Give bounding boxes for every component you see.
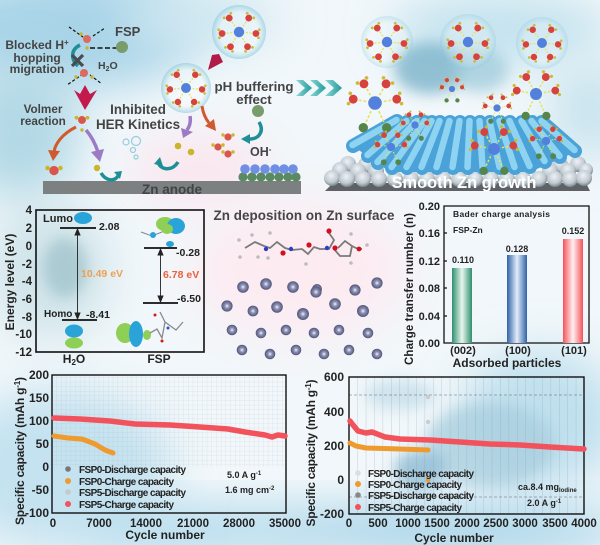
energy labels: Lumo bbox=[43, 213, 73, 225]
FSP molecule on surface bbox=[237, 228, 369, 266]
y ticks: -8 bbox=[22, 312, 33, 324]
panel: Zn deposition model bbox=[214, 208, 394, 359]
legend: FSP0-Charge capacity bbox=[368, 480, 462, 491]
x ticks: 7000 bbox=[86, 518, 112, 530]
label: OH-: - bbox=[269, 145, 272, 154]
energy labels: 2.08 bbox=[99, 221, 120, 233]
y ticks: -2 bbox=[22, 259, 32, 271]
arrow: teal chevrons bbox=[296, 80, 342, 96]
x ticks: 4000 bbox=[571, 518, 597, 530]
x ticks: 14000 bbox=[130, 518, 162, 530]
y ticks: 150 bbox=[29, 391, 49, 405]
x ticks: 3000 bbox=[512, 518, 538, 530]
label: Inhibited HER Kinetics: Inhibited bbox=[110, 102, 166, 117]
conditions bbox=[518, 482, 577, 508]
energy levels bbox=[60, 228, 178, 320]
bar values: 0.152 bbox=[562, 226, 584, 236]
x axis title: Cycle number bbox=[414, 531, 494, 545]
y ticks: 0 bbox=[42, 460, 49, 474]
x ticks: 0 bbox=[346, 518, 352, 530]
Zn anode bar: Zn anode bbox=[142, 182, 202, 197]
plot frame bbox=[444, 206, 589, 343]
legend: FSP5-Discharge capacity bbox=[79, 488, 186, 499]
y axis title: ) bbox=[13, 377, 27, 381]
arrow: orange bbox=[202, 106, 216, 131]
x labels: FSP bbox=[147, 352, 171, 366]
x ticks: 3500 bbox=[542, 518, 568, 530]
y ticks: 0 bbox=[26, 241, 32, 253]
legend: FSP5-Discharge capacity bbox=[368, 491, 474, 502]
x ticks bbox=[50, 518, 301, 530]
panel: right cycling chart bbox=[304, 370, 597, 545]
y ticks: 0.04 bbox=[419, 311, 441, 323]
y ticks: 0.12 bbox=[419, 256, 440, 268]
orbitals: FSP HOMO bbox=[116, 312, 183, 347]
annotations: FSP-Zn bbox=[453, 225, 483, 235]
heading: Zn deposition on Zn surface bbox=[214, 208, 394, 223]
x ticks: 35000 bbox=[269, 518, 301, 530]
series: FSP5 charge bbox=[54, 418, 285, 437]
label: Blocked H+ hopping migration: migration bbox=[10, 62, 64, 76]
y ticks: 2 bbox=[26, 223, 32, 235]
icon: blocked arrow bbox=[72, 45, 83, 66]
energy labels: -8.41 bbox=[86, 309, 110, 321]
molecule: H intermediates bbox=[154, 143, 194, 169]
arrow: crimson into bubble bbox=[208, 54, 223, 70]
y ticks bbox=[320, 370, 344, 521]
bar values: 0.110 bbox=[452, 255, 474, 265]
panel: HER suppression mechanism bbox=[5, 5, 301, 197]
y ticks: 100 bbox=[29, 414, 49, 428]
orbitals: FSP LUMO bbox=[141, 217, 185, 247]
legend: FSP5-Charge capacity bbox=[368, 503, 462, 514]
label: H2O: O bbox=[110, 60, 118, 72]
gray Zn base bbox=[324, 156, 593, 191]
molecule: product water bbox=[45, 166, 63, 175]
y ticks: 400 bbox=[324, 405, 344, 419]
bubble: solvated Zn lower bbox=[161, 63, 211, 113]
x ticks: 21000 bbox=[177, 518, 209, 530]
y ticks: 0.16 bbox=[419, 228, 440, 240]
x ticks bbox=[346, 518, 597, 530]
x ticks: 1000 bbox=[395, 518, 421, 530]
gap values: 6.78 eV bbox=[163, 269, 199, 281]
gap values bbox=[81, 268, 199, 281]
y ticks: -100 bbox=[25, 506, 49, 520]
x labels: (101) bbox=[561, 345, 587, 357]
y axis title: Energy level (eV) bbox=[3, 234, 17, 330]
panel: smooth Zn growth surface bbox=[324, 14, 593, 192]
label: Volmer reaction: Volmer bbox=[24, 103, 63, 116]
label: Blocked H+ hopping migration: hopping bbox=[13, 51, 61, 65]
bubble: solvated Zn upper bbox=[212, 5, 266, 59]
y ticks: 4 bbox=[26, 205, 33, 217]
bubbles with solvated Zn bbox=[361, 14, 568, 70]
label: Blocked H+ hopping migration: + bbox=[64, 38, 69, 47]
molecule: blocked water with FSP bbox=[67, 27, 128, 85]
conditions: 5.0 A g bbox=[227, 470, 256, 480]
gap values: 10.49 eV bbox=[81, 268, 123, 280]
arrow: purple right bbox=[86, 130, 104, 162]
label: Smooth Zn growth: Smooth Zn growth bbox=[392, 174, 536, 192]
y ticks: 0.08 bbox=[419, 283, 440, 295]
y axis title: Specific capacity (mAh g bbox=[304, 390, 318, 526]
y ticks: -10 bbox=[15, 329, 32, 341]
conditions: Iodine bbox=[559, 488, 577, 494]
conditions: 2.0 A g bbox=[527, 498, 556, 508]
energy labels: -6.50 bbox=[177, 293, 201, 305]
energy labels: Homo bbox=[44, 309, 72, 320]
adsorbed layers bbox=[238, 164, 301, 182]
stray points bbox=[426, 395, 430, 482]
x ticks: 28000 bbox=[223, 518, 255, 530]
label: Volmer reaction: reaction bbox=[20, 115, 66, 128]
molecule: water cluster bbox=[211, 133, 235, 158]
legend bbox=[355, 469, 474, 514]
label: OH-: OH bbox=[250, 145, 269, 159]
y ticks: 50 bbox=[36, 437, 49, 451]
x ticks: 2500 bbox=[483, 518, 509, 530]
arrow: orange left bbox=[48, 127, 76, 161]
icon: FSP buffer ball and arrow bbox=[241, 105, 264, 144]
y ticks bbox=[15, 205, 33, 359]
grid bbox=[349, 377, 584, 514]
y ticks bbox=[419, 201, 441, 350]
panel: energy level diagram bbox=[3, 205, 204, 367]
label: Blocked H+ hopping migration: Blocked H bbox=[5, 38, 69, 52]
gap arrows bbox=[75, 229, 163, 319]
x ticks: 500 bbox=[368, 518, 388, 530]
legend bbox=[65, 465, 186, 511]
y ticks: 0.00 bbox=[419, 338, 440, 350]
y ticks: 600 bbox=[324, 370, 344, 384]
x ticks: 1500 bbox=[424, 518, 450, 530]
y ticks: -50 bbox=[32, 483, 49, 497]
panel: left cycling chart bbox=[13, 368, 301, 542]
conditions: -1 bbox=[556, 499, 562, 505]
x labels: H bbox=[63, 352, 71, 366]
plot frame bbox=[349, 377, 584, 514]
series: FSP5 charge bbox=[350, 421, 584, 449]
series: FSP0 charge bbox=[54, 436, 113, 453]
x axis title: Adsorbed particles bbox=[453, 356, 562, 370]
orbitals: H2O bbox=[65, 212, 92, 348]
y ticks: -4 bbox=[22, 276, 33, 288]
molecule: Volmer water bbox=[75, 116, 89, 132]
y ticks: 200 bbox=[29, 368, 49, 382]
conditions: -2 bbox=[269, 486, 275, 492]
blue Zn capsules bbox=[352, 118, 578, 172]
conditions: 1.6 mg cm bbox=[225, 485, 269, 495]
x labels: (002) bbox=[450, 345, 476, 357]
label: H2O: 2 bbox=[106, 66, 110, 73]
plot frame bbox=[52, 375, 286, 513]
y axis title: Specific capacity (mAh g bbox=[13, 387, 27, 525]
label: pH buffering effect: pH buffering bbox=[214, 79, 294, 94]
y axis title: Charge transfer number (n) bbox=[404, 213, 416, 365]
x ticks: 2000 bbox=[454, 518, 480, 530]
label: Inhibited HER Kinetics: HER Kinetics bbox=[96, 117, 180, 132]
bar values bbox=[452, 226, 584, 265]
legend: FSP0-Discharge capacity bbox=[368, 469, 474, 480]
x labels bbox=[450, 345, 587, 357]
label: H2O: H bbox=[98, 60, 106, 72]
label: FSP: FSP bbox=[115, 24, 141, 39]
series: FSP0 charge bbox=[350, 443, 428, 450]
x axis title: Cycle number bbox=[125, 528, 205, 542]
x labels: O bbox=[76, 352, 85, 366]
plot frame bbox=[36, 210, 204, 352]
y axis title: ) bbox=[304, 380, 318, 384]
x labels bbox=[63, 352, 171, 367]
conditions: ca.8.4 mg bbox=[518, 482, 559, 492]
arrow: purple bbox=[181, 116, 193, 138]
Zn atoms bbox=[221, 277, 383, 359]
icon: hydrogen bubbles bbox=[123, 136, 140, 159]
grid bbox=[52, 375, 286, 467]
panel: Bader charge bar chart bbox=[404, 201, 589, 370]
legend: FSP0-Charge capacity bbox=[79, 477, 174, 488]
arrow: down crimson bbox=[74, 85, 97, 110]
conditions bbox=[225, 470, 275, 495]
molecule: adsorbed H bbox=[94, 165, 122, 180]
y ticks: -6 bbox=[22, 294, 32, 306]
energy labels bbox=[43, 213, 201, 321]
y ticks: -12 bbox=[15, 347, 32, 359]
label: pH buffering effect: effect bbox=[236, 92, 272, 107]
energy labels: -0.28 bbox=[176, 247, 200, 259]
legend: FSP0-Discharge capacity bbox=[79, 465, 186, 476]
legend: FSP5-Charge capacity bbox=[79, 500, 174, 511]
x labels: 2 bbox=[71, 358, 76, 367]
bar values: 0.128 bbox=[506, 244, 528, 254]
y ticks bbox=[25, 368, 49, 520]
annotations bbox=[453, 209, 550, 235]
x labels: (100) bbox=[505, 345, 531, 357]
annotations: Bader charge analysis bbox=[453, 209, 550, 219]
y ticks: -200 bbox=[320, 507, 344, 521]
conditions: -1 bbox=[256, 471, 262, 477]
x ticks: 0 bbox=[50, 518, 56, 530]
y ticks: 0 bbox=[337, 473, 344, 487]
y axis title: -1 bbox=[304, 383, 313, 390]
bars bbox=[452, 239, 583, 343]
FSP-Zn clusters bbox=[346, 70, 564, 175]
y axis title: -1 bbox=[13, 380, 22, 388]
y ticks: 0.20 bbox=[419, 201, 440, 213]
Zn anode bar bbox=[43, 181, 301, 197]
y ticks: 200 bbox=[324, 439, 344, 453]
